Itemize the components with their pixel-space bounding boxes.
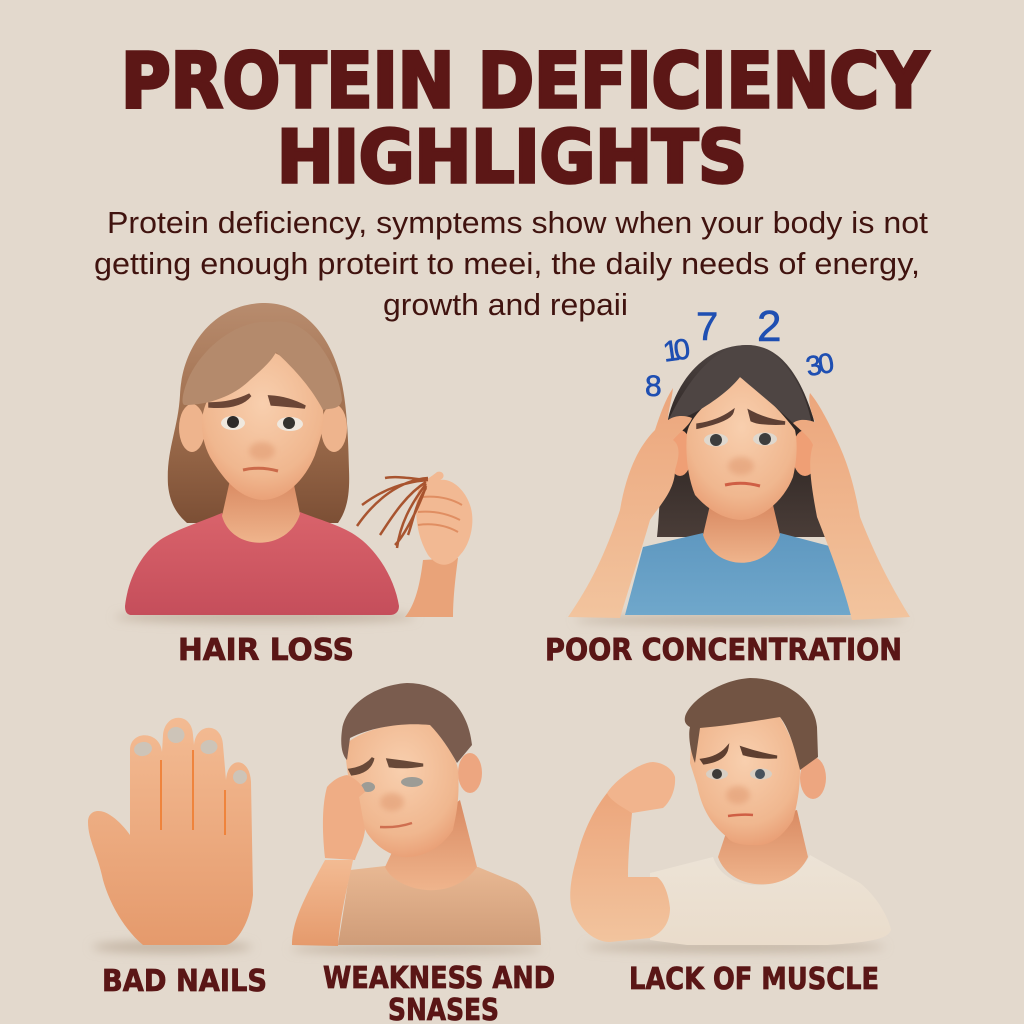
illustration: hair loss [115, 303, 472, 623]
intro text: getting enough proteirt to meei, the daily needs of energy, [94, 247, 920, 281]
floating numbers: 10 [661, 333, 692, 369]
label: bad nails: BAD NAILS [102, 964, 267, 999]
title: HIGHLIGHTS [277, 115, 747, 199]
label: weakness: WEAKNESS AND [323, 961, 555, 996]
floating numbers: 7 [696, 305, 718, 349]
floating numbers: 2 [757, 302, 781, 351]
intro text: growth and repaii [383, 288, 628, 322]
floating numbers [645, 302, 836, 403]
floating numbers: 30 [803, 347, 836, 382]
illustration: weakness [291, 683, 541, 954]
label: poor concentration: POOR CONCENTRATION [545, 633, 902, 668]
intro text [94, 206, 929, 322]
intro text: Protein deficiency, symptems show when your body is not [107, 206, 929, 240]
illustration: lack of muscle [570, 678, 891, 952]
title [121, 36, 929, 199]
illustration: poor concentration [568, 345, 910, 625]
title: PROTEIN DEFICIENCY [121, 36, 929, 125]
floating numbers: 8 [645, 370, 662, 403]
label: weakness [323, 961, 555, 1024]
label: hair loss: HAIR LOSS [178, 633, 354, 668]
illustration: hand with bad nails [88, 718, 253, 953]
label: lack of muscle: LACK OF MUSCLE [629, 962, 879, 997]
